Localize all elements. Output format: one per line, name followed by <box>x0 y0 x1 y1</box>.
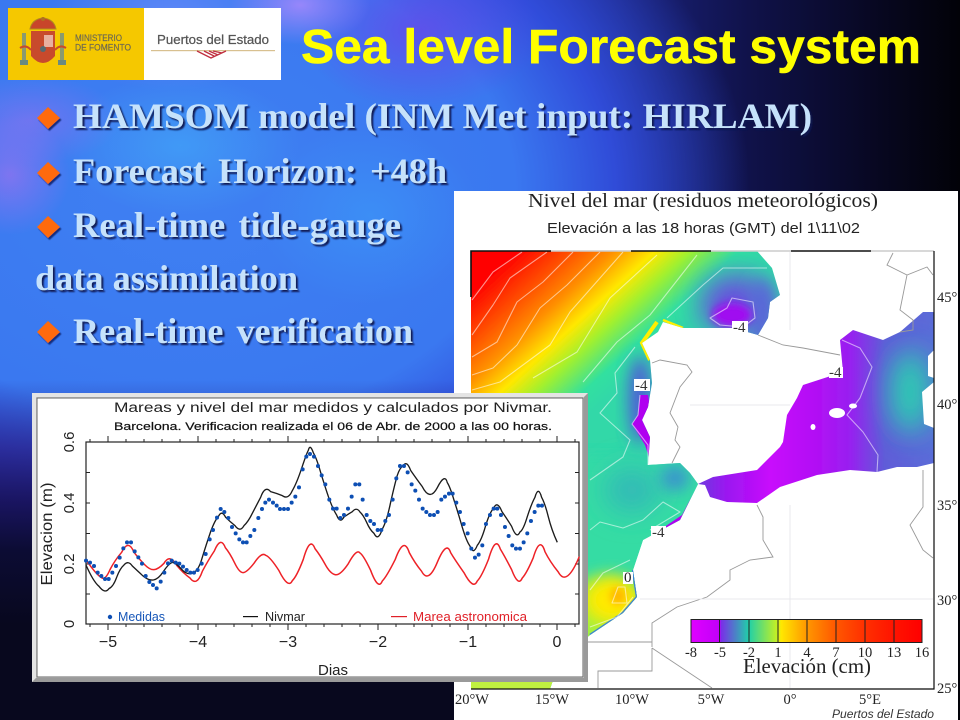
map title: Nivel del mar (residuos meteorológicos) <box>528 190 878 212</box>
longitude labels: 20°W <box>455 692 489 708</box>
purple coastal bands <box>632 395 650 460</box>
bullet 3 continuation: data assimilation <box>35 258 298 298</box>
x axis labels: −4 <box>189 634 207 651</box>
legend values: 1 <box>774 645 782 661</box>
legend values: 7 <box>832 645 840 661</box>
y axis labels: 0 <box>61 620 78 628</box>
legend: Nivmar <box>243 609 306 624</box>
legend caption: Elevación (cm) <box>743 654 871 678</box>
bullet 1: HAMSOM model (INM Met input: HIRLAM) <box>73 96 812 136</box>
x axis labels: 0 <box>553 634 562 651</box>
contour label 0: 0 <box>624 570 632 586</box>
contour label -4 Mediterranean: -4 <box>829 365 842 381</box>
legend: Medidas: Medidas <box>118 609 165 624</box>
chart title: Mareas y nivel del mar medidos y calculados por Nivmar. <box>114 400 552 415</box>
x axis labels <box>99 634 562 651</box>
plot box and ticks <box>86 436 579 630</box>
legend values <box>685 645 929 661</box>
logo: Ministerio de Fomento and Puertos del Estado: DE FOMENTO <box>75 42 131 52</box>
legend values: -2 <box>743 645 755 661</box>
latitude labels: 25° <box>937 681 958 697</box>
map: Mediterranean field <box>698 312 934 503</box>
line: Nivmar forecast, black <box>86 447 557 591</box>
map: plot frame <box>471 251 934 689</box>
x axis labels: −5 <box>99 634 117 651</box>
line: astronomical tide, red <box>86 542 579 584</box>
legend values: -5 <box>714 645 726 661</box>
contour label -4 Morocco: -4 <box>652 525 665 541</box>
bullet list <box>35 96 812 351</box>
bullet 4: Real-time verification <box>73 311 413 351</box>
x axis labels: −2 <box>369 634 387 651</box>
longitude labels: 5°E <box>859 692 881 708</box>
longitude labels: 0° <box>783 692 797 708</box>
bullet 2: Forecast Horizon: +48h <box>73 151 447 191</box>
x axis labels: −3 <box>279 634 297 651</box>
chart subtitle: Barcelona. Verificacion realizada el 06 de Abr. de 2000 a las 00 horas. <box>114 421 552 433</box>
map: sea fields and borders <box>471 251 940 700</box>
legend values: 13 <box>887 645 901 661</box>
map: contour lines <box>472 252 878 627</box>
chart legend <box>108 609 528 624</box>
map grid lines <box>640 252 933 688</box>
map subtitle: Elevación a las 18 horas (GMT) del 1\11\02 <box>547 221 860 237</box>
y axis labels: 0.2 <box>61 554 78 574</box>
logo: Ministerio de Fomento and Puertos del Estado <box>8 8 281 80</box>
points: measured values, blue <box>86 454 542 588</box>
title: Sea level Forecast system <box>301 21 921 74</box>
x axis title: Dias <box>318 662 348 679</box>
legend values: 10 <box>858 645 872 661</box>
Puertos del Estado name: Puertos del Estado <box>157 32 269 47</box>
latitude labels: 40° <box>937 397 958 413</box>
latitude labels <box>937 290 958 697</box>
y axis labels: 0.4 <box>61 493 78 513</box>
contour label -4 Portugal: -4 <box>635 378 648 394</box>
latitude labels: 30° <box>937 593 958 609</box>
data series <box>86 447 579 591</box>
map: islands <box>810 350 934 430</box>
panel: sea level residual map <box>454 190 958 720</box>
longitude labels: 5°W <box>698 692 725 708</box>
legend colorbar <box>685 619 929 678</box>
bullet 3: Real-time tide-gauge <box>73 205 401 245</box>
legend: Nivmar: Nivmar <box>265 609 306 624</box>
y axis title: Elevacion (m) <box>39 482 56 586</box>
longitude labels <box>455 692 881 708</box>
icon: Spanish coat of arms <box>20 17 66 65</box>
ministry name: MINISTERIO <box>75 33 122 43</box>
y axis labels: 0.6 <box>61 432 78 452</box>
contour label -4 Bay of Biscay: -4 <box>733 320 746 336</box>
y axis labels <box>61 432 78 628</box>
latitude labels: 35° <box>937 498 958 514</box>
legend values: -8 <box>685 645 697 661</box>
legend values: 16 <box>915 645 929 661</box>
latitude labels: 45° <box>937 290 958 306</box>
panel: tide verification chart <box>32 393 588 682</box>
map: land borders <box>588 253 933 688</box>
legend: Marea astronomica: Marea astronomica <box>413 609 528 624</box>
legend values: 4 <box>803 645 811 661</box>
longitude labels: 15°W <box>535 692 569 708</box>
x axis labels: −1 <box>459 634 477 651</box>
longitude labels: 10°W <box>615 692 649 708</box>
icon: Puertos red zigzag <box>197 51 226 58</box>
